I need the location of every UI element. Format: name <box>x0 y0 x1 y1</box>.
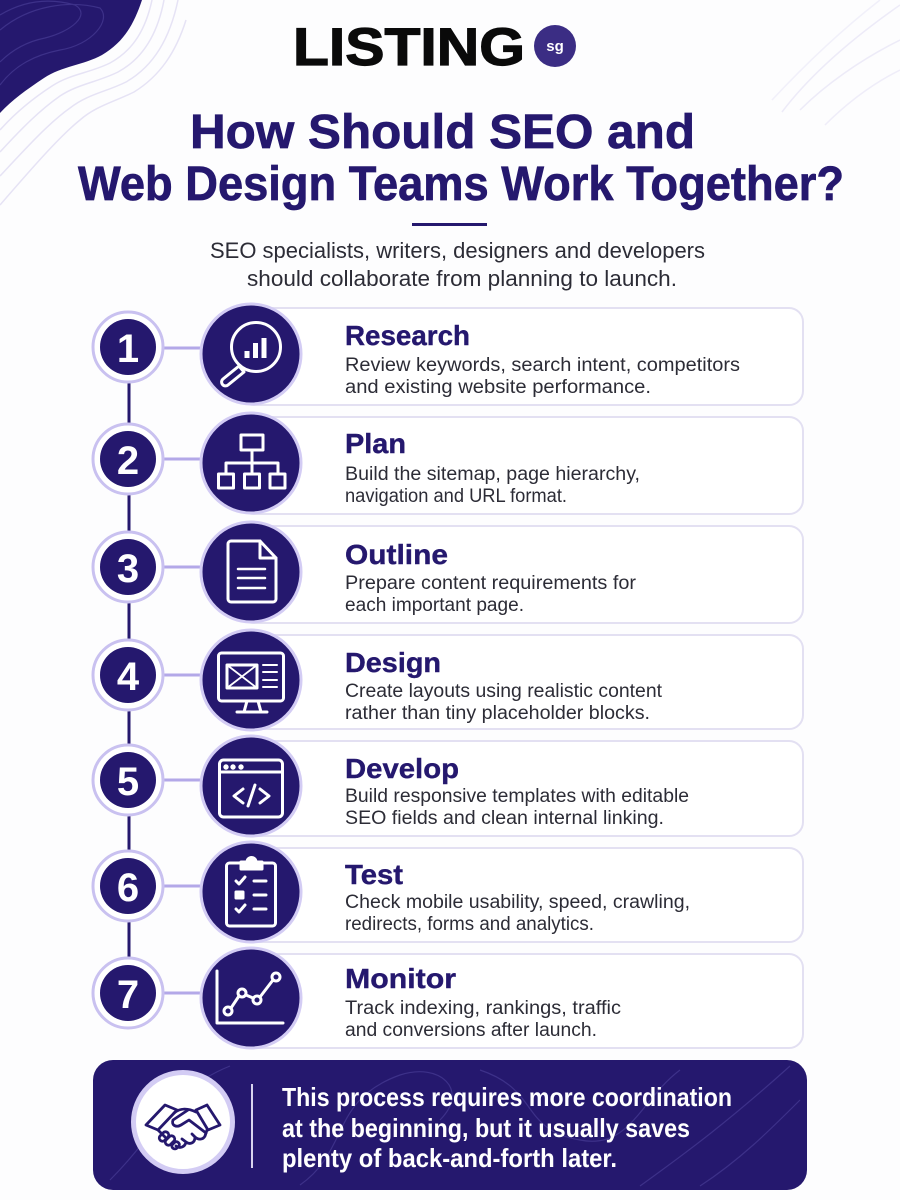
step 6: test: Check mobile usability, speed, crawling, <box>345 892 690 913</box>
icon: line chart <box>217 971 283 1023</box>
step 2: plan: 2 <box>117 439 139 483</box>
decorative corner blob top left <box>0 0 186 205</box>
callout text: This process requires more coordination <box>282 1082 732 1112</box>
decorative contour lines top right <box>772 0 900 125</box>
icon: handshake <box>134 1072 232 1172</box>
step 1: research: Review keywords, search intent, competitors <box>345 355 740 376</box>
icon: document <box>228 541 276 602</box>
icon: magnifier <box>222 322 280 386</box>
step 7: monitor: 7 <box>117 973 139 1017</box>
step 6: test: 6 <box>117 866 139 910</box>
step 3: outline: Outline <box>345 539 448 570</box>
step 2: plan: Build the sitemap, page hierarchy, <box>345 464 640 485</box>
step 6: test: Test <box>345 859 403 890</box>
subtitle: SEO specialists, writers, designers and developers <box>210 238 705 263</box>
step 3: outline: Prepare content requirements for <box>345 573 637 594</box>
step 5: develop <box>93 736 803 836</box>
icon: monitor <box>218 653 284 712</box>
step 5: develop: Develop <box>345 753 459 784</box>
step 2: plan: Plan <box>345 428 406 459</box>
callout text <box>282 1082 732 1173</box>
callout text: at the beginning, but it usually saves <box>282 1113 690 1143</box>
step 4: design: Create layouts using realistic content <box>345 681 663 702</box>
step 3: outline: 3 <box>117 547 139 591</box>
step 4: design <box>93 630 803 730</box>
subtitle <box>210 238 705 291</box>
step 1: research: 1 <box>117 327 139 371</box>
callout banner <box>93 1060 807 1190</box>
icon: browser code <box>220 760 282 817</box>
step 3: outline <box>93 522 803 623</box>
step 4: design: rather than tiny placeholder blocks. <box>345 703 650 724</box>
step 3: outline: each important page. <box>345 595 524 616</box>
timeline spine <box>128 380 130 960</box>
callout text: plenty of back-and-forth later. <box>282 1143 617 1173</box>
step 5: develop: SEO fields and clean internal linking. <box>345 808 664 829</box>
step 1: research <box>93 304 803 405</box>
step 1: research: and existing website performance. <box>345 377 651 398</box>
icon: sitemap <box>218 435 285 488</box>
title: Web Design Teams Work Together? <box>78 158 844 211</box>
step 5: develop: 5 <box>117 760 139 804</box>
title <box>78 106 844 211</box>
step 6: test <box>93 842 803 942</box>
step 4: design: Design <box>345 647 441 678</box>
step 7: monitor: Track indexing, rankings, traffic <box>345 998 621 1019</box>
step 2: plan: navigation and URL format. <box>345 486 567 507</box>
step 7: monitor: and conversions after launch. <box>345 1020 597 1041</box>
subtitle: should collaborate from planning to launch. <box>247 266 677 291</box>
step 7: monitor <box>93 948 803 1048</box>
logo: sg <box>546 38 564 55</box>
icon: clipboard <box>226 858 276 926</box>
step 1: research: Research <box>345 320 470 351</box>
step 2: plan <box>93 413 803 514</box>
step 5: develop: Build responsive templates with editable <box>345 786 689 807</box>
step 7: monitor: Monitor <box>345 963 456 994</box>
step 6: test: redirects, forms and analytics. <box>345 914 594 935</box>
step 4: design: 4 <box>117 655 140 699</box>
logo: LISTING <box>293 18 525 77</box>
title: How Should SEO and <box>190 106 695 159</box>
